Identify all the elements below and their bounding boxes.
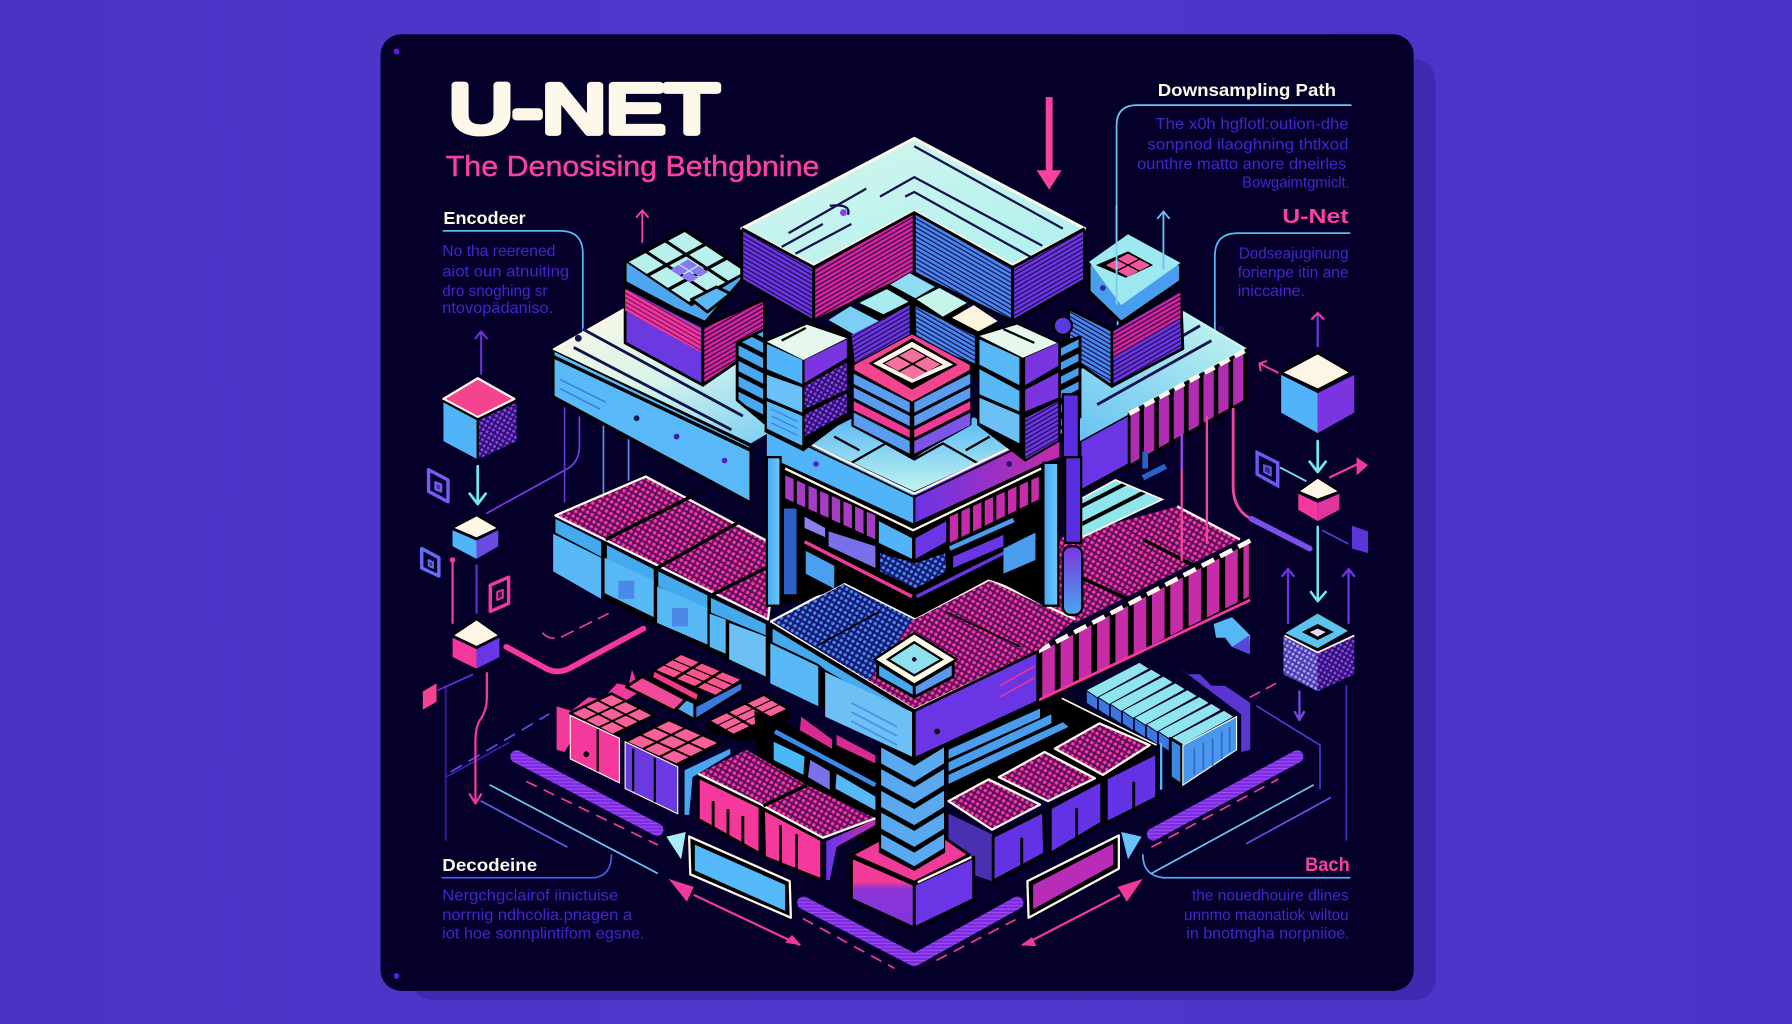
- text block: encoder: dro snoghing sr: [442, 283, 548, 300]
- bottom tier: [517, 654, 1297, 960]
- text block: bach: [1143, 854, 1350, 942]
- purple tubes and bottom frame: [517, 757, 1297, 960]
- square icons: [422, 470, 509, 611]
- upper chevron block: [742, 138, 1085, 321]
- up arrow: [475, 331, 487, 374]
- text block: decoder: [442, 855, 645, 942]
- cube r3: [1283, 635, 1318, 691]
- cube r2: [1298, 494, 1318, 521]
- serrated backdrop right: [1177, 666, 1250, 752]
- small blue up arrow: [1158, 211, 1169, 269]
- text block: bach: unnmo maonatiok wiltou: [1184, 907, 1349, 924]
- right column: [977, 317, 1079, 497]
- text block: u-net: forienpe itin ane: [1238, 265, 1349, 282]
- left icon column: [422, 331, 643, 803]
- mint long arrow: [1311, 527, 1326, 601]
- pink line: [452, 560, 454, 623]
- purple line: [476, 565, 478, 614]
- cube 1: [443, 402, 478, 459]
- text block: decoder: iot hoe sonnplintifom egsne.: [442, 925, 645, 942]
- text block: downsampling path: The x0h hgflotl:oution-dhe: [1155, 116, 1349, 133]
- right tiled stack: [1069, 234, 1183, 386]
- text block: downsampling path: ounthre matto anore dneirles: [1137, 156, 1346, 173]
- cube r1: [1281, 375, 1318, 433]
- text block: u-net: iniccaine.: [1238, 283, 1305, 300]
- text block: decoder: Decodeine: [442, 855, 537, 875]
- mint arrow: [470, 466, 486, 504]
- purple block g: [949, 814, 992, 881]
- center shelves: [754, 711, 882, 851]
- middle tier left: [553, 477, 777, 680]
- top cube on box: [874, 633, 957, 685]
- text block: downsampling path: Downsampling Path: [1158, 80, 1336, 100]
- panel shadow: [411, 59, 1435, 1000]
- text block: u-net: [1215, 205, 1350, 322]
- center column: [879, 731, 945, 871]
- top pink arrow: [1037, 97, 1062, 190]
- pink right arrow: [1329, 464, 1358, 478]
- central box: [737, 329, 1080, 523]
- pink small arrow: [1259, 361, 1278, 373]
- text block: encoder: ntovopädaniso.: [442, 300, 553, 317]
- right icon column: [1214, 313, 1368, 720]
- text block: bach: Bach: [1305, 854, 1350, 876]
- blue guide line over right stack: [1116, 206, 1118, 304]
- main dark panel: [381, 34, 1414, 991]
- pink wave arrow: [470, 673, 487, 803]
- right badge: [1031, 840, 1115, 913]
- text block: u-net: Dodseajuginung: [1239, 245, 1349, 262]
- up arrow: [1317, 315, 1319, 346]
- text block: bach: in bnotmgha norpniioe.: [1186, 925, 1350, 942]
- tile block e: [709, 695, 789, 741]
- left stair strips: [737, 329, 765, 423]
- pink block f: [698, 750, 875, 838]
- pink dimension arrows: [669, 879, 1143, 946]
- purple square: [1257, 453, 1278, 486]
- triangle markers: [666, 832, 686, 859]
- pink connector tube: [506, 629, 643, 671]
- serrated backdrop left: [557, 670, 640, 752]
- small icon: [1352, 526, 1368, 553]
- text block: encoder: [442, 208, 583, 331]
- text block: encoder: aiot oun atnuiting: [442, 264, 569, 281]
- text block: downsampling path: [1117, 80, 1351, 303]
- purple up arrows: [1282, 569, 1354, 623]
- central tiles under chevron: [817, 272, 1006, 377]
- text block: decoder: Nergchgclairof iinictuise: [442, 888, 618, 905]
- tile strip d: [626, 677, 686, 711]
- down arrow: [1295, 691, 1304, 720]
- left tiled stack: [625, 230, 765, 385]
- cube 3: [453, 638, 477, 669]
- front box: [768, 579, 1075, 759]
- title: U-NET: [449, 71, 719, 148]
- mint arrow: [1310, 441, 1326, 472]
- subtitle: The Denosising Bethgbnine: [446, 151, 819, 183]
- vertical pink links: [1182, 409, 1310, 560]
- connector lines and guides: [446, 303, 1346, 968]
- text block: bach: the nouedhouire dlines: [1192, 888, 1349, 905]
- text block: encoder: No tha reerened: [442, 243, 555, 260]
- left badge: [693, 841, 787, 914]
- text block: downsampling path: Bowgaimtgmiclt.: [1242, 174, 1350, 191]
- purple block b: [625, 720, 720, 765]
- upper left slab: [553, 309, 823, 503]
- blue corner arrow: [1214, 617, 1250, 654]
- upper right slab: [1006, 312, 1247, 491]
- right stair strips: [1059, 337, 1080, 429]
- panel corner dots: [394, 49, 399, 979]
- pink block a: [570, 694, 654, 735]
- central small stack: [851, 334, 971, 458]
- text block: encoder: Encodeer: [443, 208, 526, 228]
- text block: u-net: U-Net: [1282, 205, 1349, 228]
- tile block c: [658, 687, 695, 720]
- text block: downsampling path: sonpnod ilaoghning thtlxod: [1147, 137, 1349, 154]
- right shelves: [945, 695, 1159, 800]
- middle tier right: [914, 480, 1250, 759]
- cube 2: [453, 530, 477, 559]
- left column: [765, 322, 849, 451]
- small pink up arrow: [637, 210, 648, 242]
- frame window: [767, 457, 1082, 618]
- mint ribs block h: [1087, 663, 1149, 710]
- text block: decoder: norrnig ndhcolia.pnagen a: [442, 907, 632, 924]
- pink base cube: [851, 837, 969, 882]
